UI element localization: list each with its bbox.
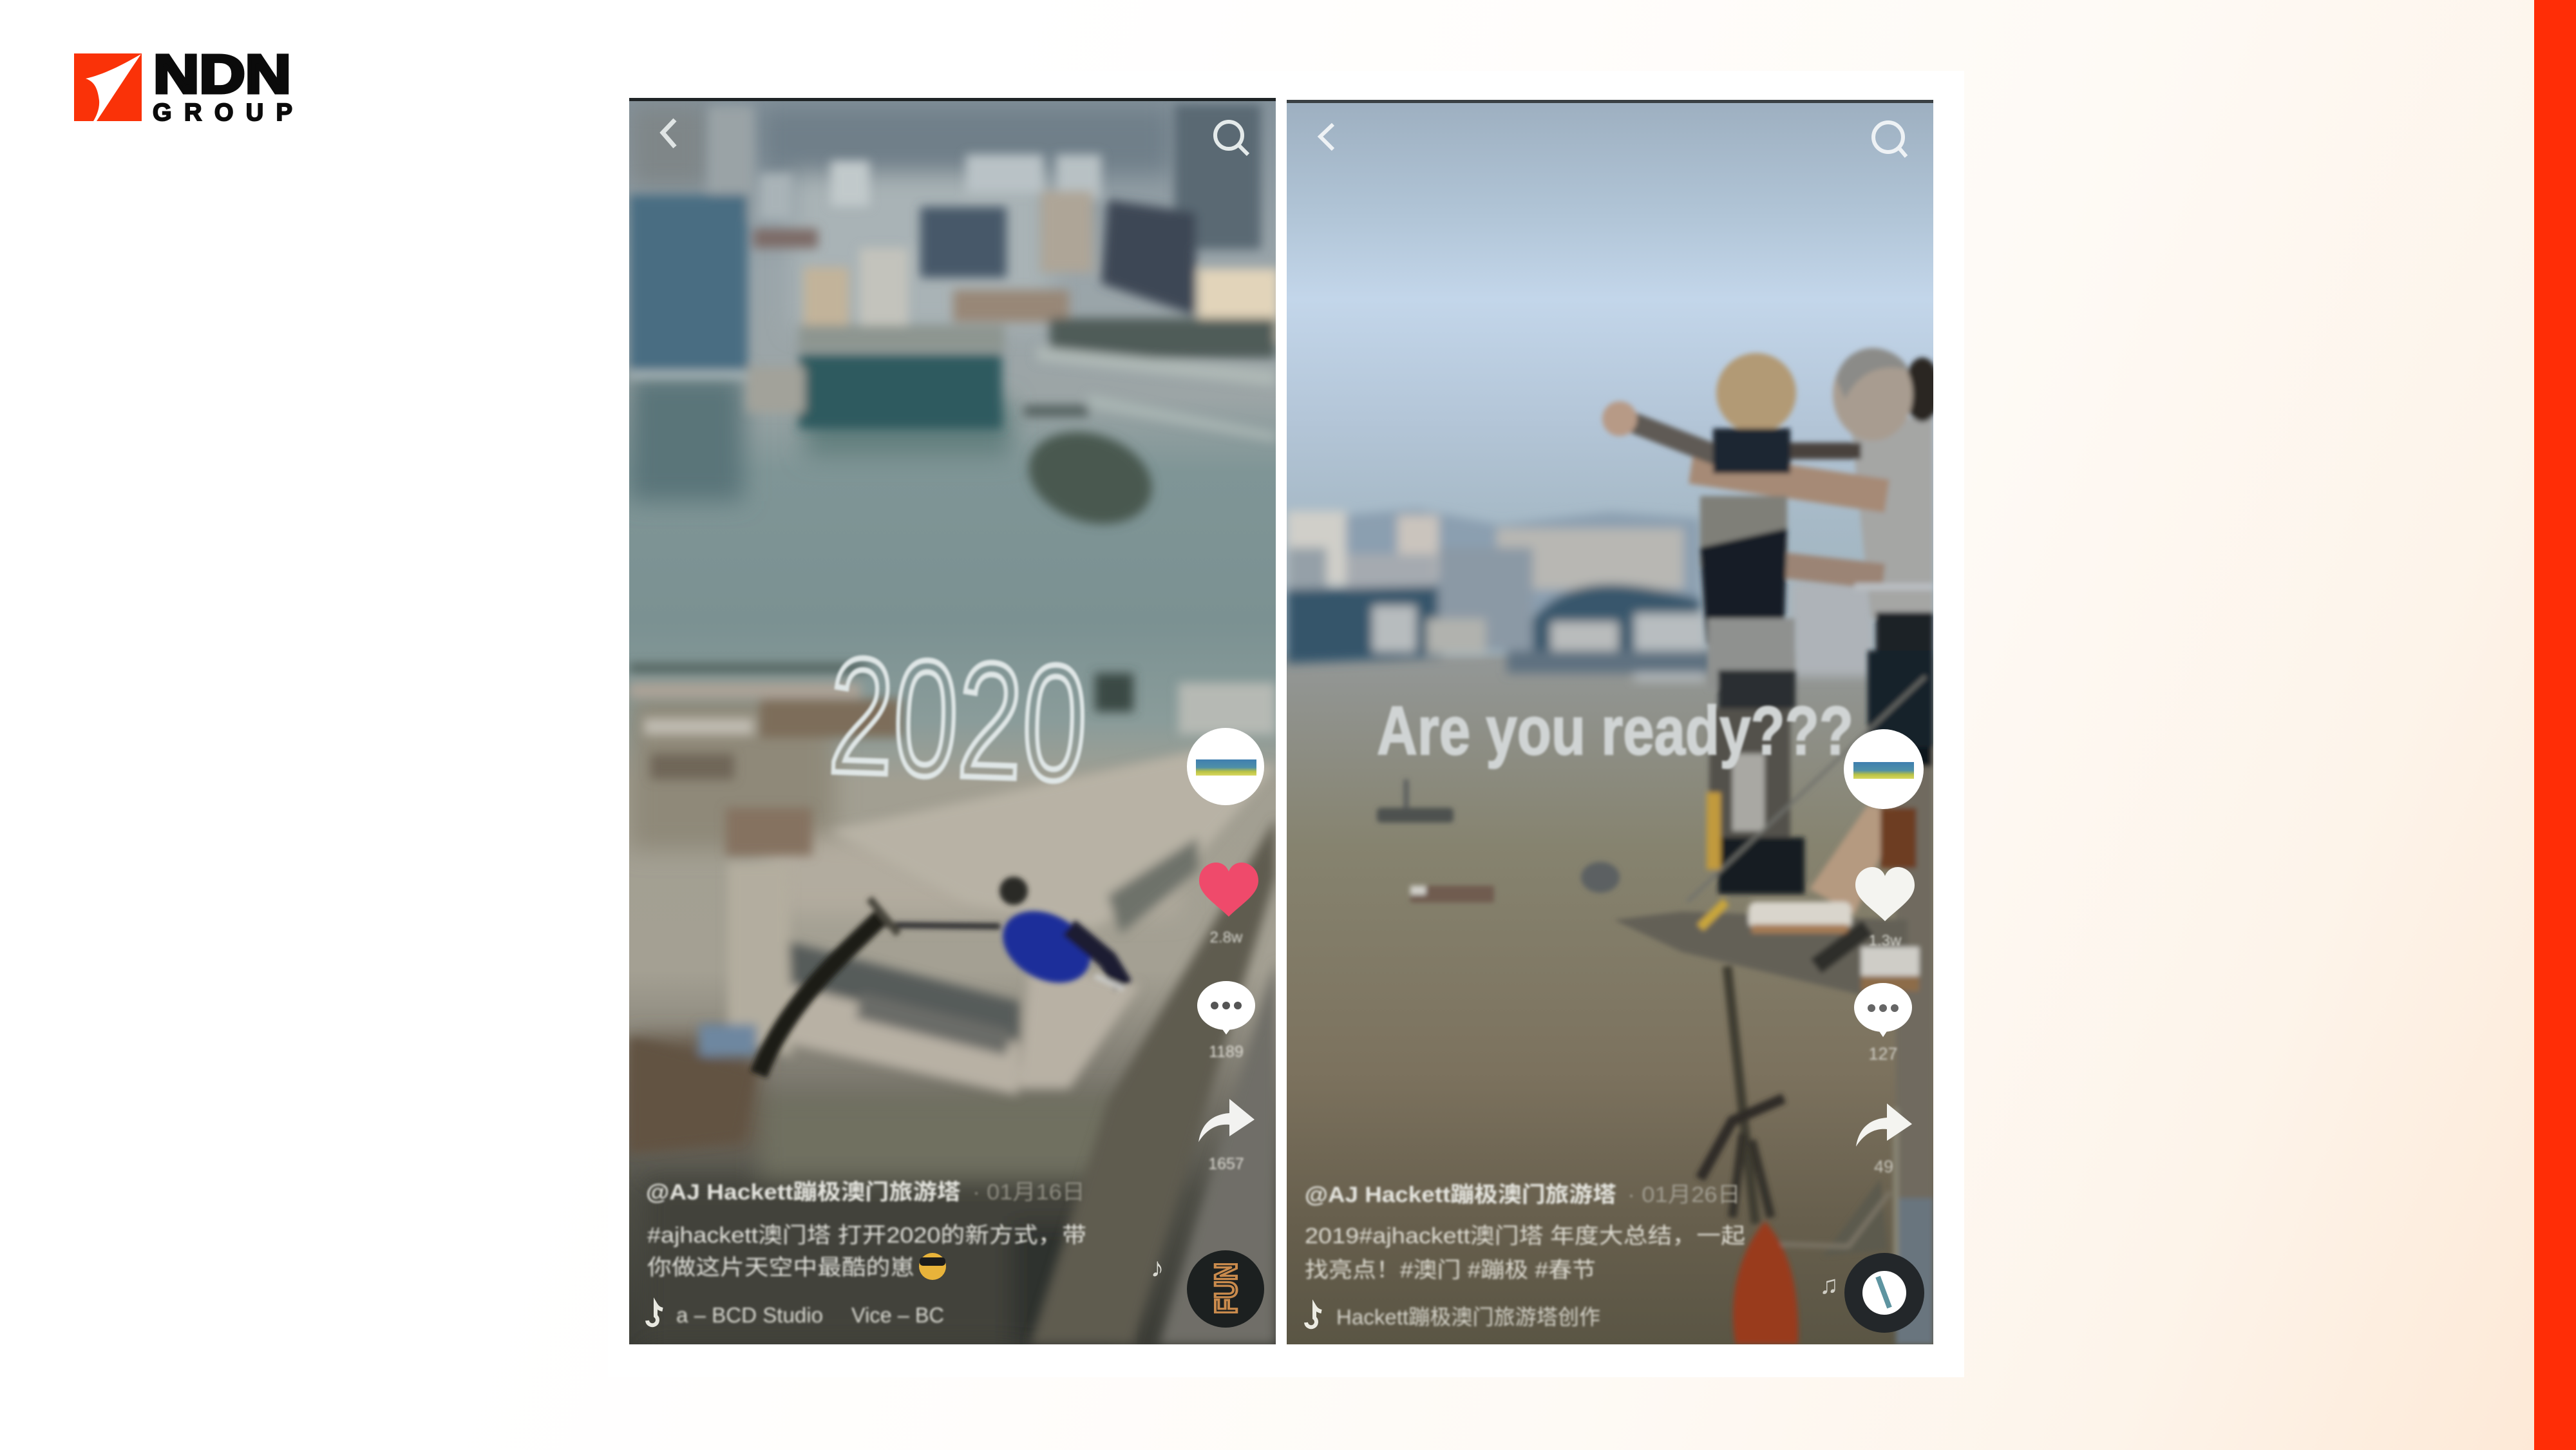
- logo wordmark NDN: NDN: [153, 44, 291, 104]
- panel: right phone screenshot, are you ready: [1287, 100, 1940, 1344]
- caption: description: #ajhackett澳门塔 打开2020的新方式，带: [647, 1223, 1086, 1248]
- caption: description: 2019#ajhackett澳门塔 年度大总结，一起: [1305, 1224, 1745, 1248]
- comment count: 127: [1868, 1044, 1898, 1064]
- photo: aerial Macau skyline and jumper: [629, 98, 1278, 1344]
- caption: account and date: [646, 1180, 1085, 1205]
- caption: description: [1305, 1224, 1745, 1283]
- icon: account avatar: [1844, 729, 1924, 809]
- icon: comment bubble: [1197, 981, 1255, 1035]
- logo: NDN Group: [74, 44, 292, 126]
- icon: back chevron: [663, 120, 675, 147]
- caption: account and date: · 01月16日: [972, 1180, 1085, 1205]
- caption: account and date: @AJ Hackett蹦极澳门旅游塔: [1305, 1183, 1616, 1207]
- icon: red square with paper plane: [74, 53, 142, 121]
- panel: left phone screenshot, 2020 jump: [629, 98, 1278, 1344]
- icon: music disc: [1187, 1250, 1264, 1328]
- caption: description: 你做这片天空中最酷的崽: [647, 1255, 914, 1280]
- icon: music note: [1306, 1306, 1321, 1327]
- boats: [1377, 808, 1454, 823]
- icon: account avatar: [1187, 728, 1264, 805]
- tower wall: [1896, 747, 1933, 1211]
- like count: 2.8w: [1210, 929, 1243, 946]
- share count: 49: [1874, 1157, 1893, 1176]
- overlay text: Are you ready???: Are you ready???: [1377, 692, 1853, 769]
- icon: back chevron: [1320, 124, 1333, 149]
- bungee cord: [759, 915, 884, 1074]
- icon: comment bubble: [1854, 983, 1912, 1037]
- icon: share arrow: [1198, 1099, 1255, 1142]
- icon: small music note: ♫: [1819, 1271, 1839, 1299]
- icon: share arrow: [1856, 1103, 1912, 1147]
- icon: search: [1873, 122, 1906, 157]
- caption: music credit: a – BCD Studio: [676, 1303, 823, 1327]
- comment count: 1189: [1209, 1043, 1244, 1061]
- caption: music credit: [676, 1303, 944, 1327]
- icon: like heart, white: [1855, 867, 1915, 921]
- icon: sunglasses emoji: [919, 1253, 946, 1280]
- girl in sequins: [1716, 353, 1796, 433]
- caption: account and date: [1305, 1183, 1741, 1207]
- caption: account and date: · 01月26日: [1627, 1183, 1741, 1207]
- like count: 1.3w: [1869, 932, 1902, 949]
- photo: Macau Tower edge with jumper and crew: [1287, 100, 1940, 1344]
- icon: music disc: FUN: [1209, 1263, 1244, 1314]
- accent bar: right edge: [2534, 0, 2576, 1450]
- icon: small music note: ♪: [1150, 1252, 1164, 1283]
- icon: search: [1215, 122, 1248, 155]
- top edge shadow: [1287, 100, 1933, 103]
- jump platform: [1614, 911, 1908, 995]
- caption: description: 找亮点！#澳门 #蹦极 #春节: [1305, 1258, 1596, 1283]
- share count: 1657: [1208, 1155, 1244, 1173]
- man in grey shirt: [1852, 412, 1933, 618]
- red bag: [1733, 1221, 1798, 1344]
- logo wordmark GROUP: GROUP: [153, 99, 292, 126]
- chain and rigging: [1727, 966, 1756, 1224]
- icon: like heart, red: [1199, 863, 1258, 917]
- icon: music note: [647, 1304, 663, 1325]
- caption: music credit: Hackett蹦极澳门旅游塔创作: [1336, 1305, 1600, 1329]
- caption: music credit: Vice – BC: [851, 1303, 944, 1327]
- decorative text: 2020: 2020: [826, 624, 1090, 816]
- jumper in blue: [999, 907, 1094, 987]
- white content panel: [608, 71, 1964, 1377]
- top edge shadow: [629, 98, 1276, 101]
- icon: music disc: [1844, 1253, 1924, 1333]
- caption: account and date: @AJ Hackett蹦极澳门旅游塔: [646, 1180, 961, 1205]
- legs of crew: [1810, 805, 1900, 915]
- caption: description: [647, 1223, 1086, 1280]
